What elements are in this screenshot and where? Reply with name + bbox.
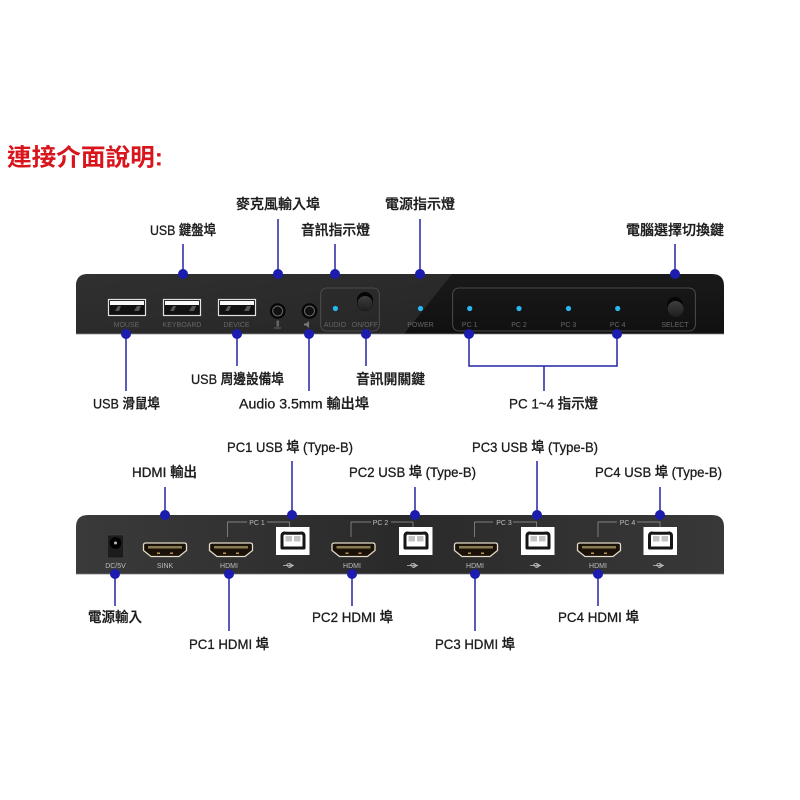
- callout: USB mouse port: USB 滑鼠埠: [93, 396, 160, 412]
- PC2 group: PC 2: [373, 520, 388, 527]
- callout: PC1 USB: [227, 439, 353, 520]
- callout: USB keyboard port: USB 鍵盤埠: [150, 222, 216, 238]
- callout: audio output: [239, 329, 369, 412]
- callout: PC2 USB: PC2 USB 埠 (Type-B): [349, 464, 476, 480]
- callout: audio indicator: [301, 222, 370, 279]
- title: 連接介面說明:: [7, 144, 163, 172]
- callout: HDMI output: [132, 464, 197, 520]
- callout: power input: 電源輸入: [88, 609, 142, 625]
- callout: PC3 USB: [472, 439, 598, 520]
- PC4 group: [578, 520, 677, 570]
- callout: audio switch: [356, 329, 425, 387]
- callout: PC 1-4 indicators: [464, 329, 622, 412]
- callout: PC1 HDMI: PC1 HDMI 埠: [189, 636, 269, 652]
- microphone jack: [270, 303, 286, 328]
- panel: front of switch: [76, 274, 724, 334]
- callout: audio indicator: 音訊指示燈: [301, 222, 370, 238]
- callout: PC2 USB: [349, 464, 476, 520]
- USB device port: DEVICE: [223, 322, 250, 329]
- DC power jack: [105, 535, 126, 570]
- PC2 group: HDMI: [343, 563, 361, 570]
- PC indicator box: PC 2: [511, 322, 527, 329]
- USB keyboard port: [163, 300, 201, 329]
- PC indicator box: SELECT: [661, 322, 689, 329]
- PC1 group: [210, 520, 310, 570]
- DC power jack: DC/5V: [105, 563, 126, 570]
- callout: PC2 HDMI: [312, 569, 393, 625]
- callout: USB mouse port: [93, 329, 160, 412]
- callout: USB device port: USB 周邊設備埠: [191, 371, 284, 387]
- USB mouse port: [108, 300, 146, 329]
- PC3 group: PC 3: [496, 520, 512, 527]
- callout: PC 1-4 indicators: PC 1~4 指示燈: [509, 396, 598, 412]
- HDMI sink port: [144, 543, 186, 570]
- PC indicator box: [453, 288, 695, 331]
- audio out jack: [302, 303, 317, 328]
- HDMI sink port: SINK: [157, 563, 173, 570]
- audio control box: AUDIO: [324, 322, 347, 329]
- PC3 group: HDMI: [466, 563, 484, 570]
- callout: PC4 HDMI: [558, 569, 639, 625]
- callout: PC4 HDMI: PC4 HDMI 埠: [558, 609, 639, 625]
- PC4 group: PC 4: [620, 520, 635, 527]
- PC3 group: [454, 520, 554, 570]
- callout: PC3 HDMI: [435, 569, 515, 652]
- callout: PC4 USB: [595, 464, 722, 520]
- PC4 group: HDMI: [589, 563, 607, 570]
- power indicator: [407, 306, 434, 329]
- callout: audio switch: 音訊開關鍵: [356, 371, 425, 387]
- PC1 group: PC 1: [249, 520, 265, 527]
- callout: power input: [88, 569, 142, 625]
- PC indicator box: PC 3: [561, 322, 576, 329]
- USB keyboard port: KEYBOARD: [163, 322, 201, 329]
- callout: PC3 HDMI: PC3 HDMI 埠: [435, 636, 515, 652]
- callout: power indicator: 電源指示燈: [385, 196, 455, 212]
- callout: PC1 USB: PC1 USB 埠 (Type-B): [227, 439, 353, 455]
- callout: microphone input: 麥克風輸入埠: [236, 196, 320, 212]
- audio control box: ON/OFF: [352, 322, 378, 329]
- callout: PC1 HDMI: [189, 569, 269, 652]
- PC2 group: [332, 520, 432, 570]
- PC1 group: HDMI: [220, 563, 238, 570]
- callout: microphone input: [236, 196, 320, 279]
- audio control box: [321, 288, 379, 331]
- PC indicator box: PC 4: [610, 322, 626, 329]
- callout: PC4 USB: PC4 USB 埠 (Type-B): [595, 464, 722, 480]
- PC indicator box: PC 1: [462, 322, 478, 329]
- callout: USB device port: [191, 329, 284, 387]
- panel: rear of switch: [76, 515, 724, 574]
- callout: PC select key: [626, 222, 724, 279]
- callout: PC2 HDMI: PC2 HDMI 埠: [312, 609, 393, 625]
- callout: power indicator: [385, 196, 455, 279]
- callout: HDMI output: HDMI 輸出: [132, 464, 197, 480]
- USB mouse port: MOUSE: [114, 322, 140, 329]
- callout: audio output: Audio 3.5mm 輸出埠: [239, 396, 369, 412]
- callout: PC select key: 電腦選擇切換鍵: [626, 222, 724, 238]
- USB device port: [218, 300, 256, 329]
- power indicator: POWER: [407, 322, 434, 329]
- callout: PC3 USB: PC3 USB 埠 (Type-B): [472, 439, 598, 455]
- callout: USB keyboard port: [150, 222, 216, 279]
